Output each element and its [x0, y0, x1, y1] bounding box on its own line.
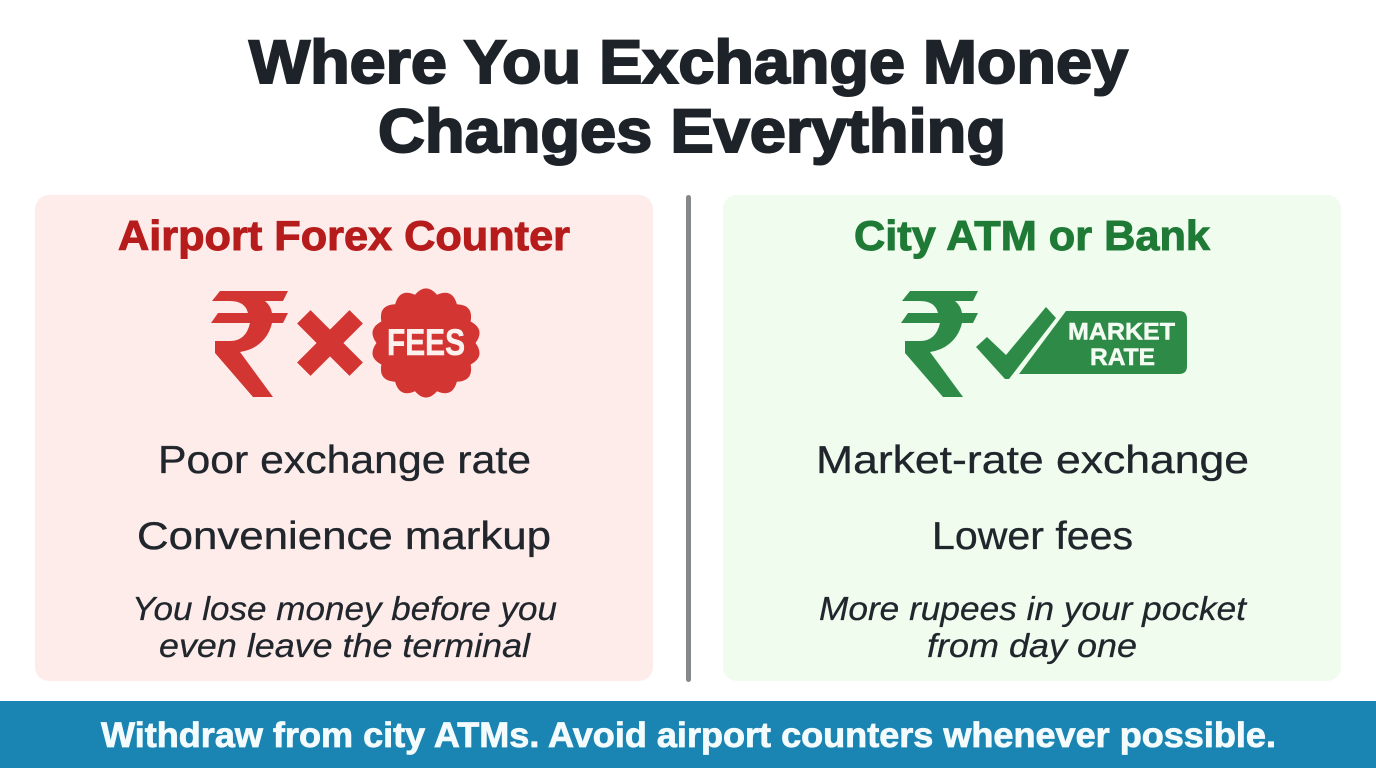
bottom banner: [0, 701, 1376, 768]
icon: rupee with cross and fees badge: [211, 279, 491, 407]
divider: [686, 195, 691, 682]
text: market-rate exchange: Market-rate exchange: [816, 439, 1249, 482]
title: Where You Exchange Money: [249, 28, 1128, 96]
icon: rupee with check and market rate tag: RATE: [1090, 344, 1155, 371]
note: lose money: You lose money before you: [132, 590, 557, 627]
heading: airport forex counter: Airport Forex Counter: [118, 212, 570, 259]
note: lose money: [132, 590, 557, 664]
icon: rupee with cross and fees badge: FEES: [387, 322, 465, 363]
note: more rupees: More rupees in your pocket: [819, 590, 1248, 627]
note: more rupees: from day one: [927, 627, 1137, 664]
panel: city atm or bank: [723, 195, 1341, 681]
text: convenience markup: Convenience markup: [137, 515, 551, 558]
icon: rupee with check and market rate tag: MARKET: [1068, 318, 1175, 346]
title: Changes Everything: [378, 97, 1006, 165]
panel: airport forex counter: [35, 195, 653, 681]
note: more rupees: [819, 590, 1248, 664]
note: lose money: even leave the terminal: [159, 627, 532, 664]
text: lower fees: Lower fees: [932, 515, 1133, 558]
title: [249, 28, 1128, 165]
icon: rupee with check and market rate tag: [901, 291, 1187, 397]
heading: city atm or bank: City ATM or Bank: [854, 212, 1211, 259]
text: poor exchange rate: Poor exchange rate: [158, 439, 531, 482]
banner text: Withdraw from city ATMs. Avoid airport counters whenever possible.: [101, 716, 1276, 755]
